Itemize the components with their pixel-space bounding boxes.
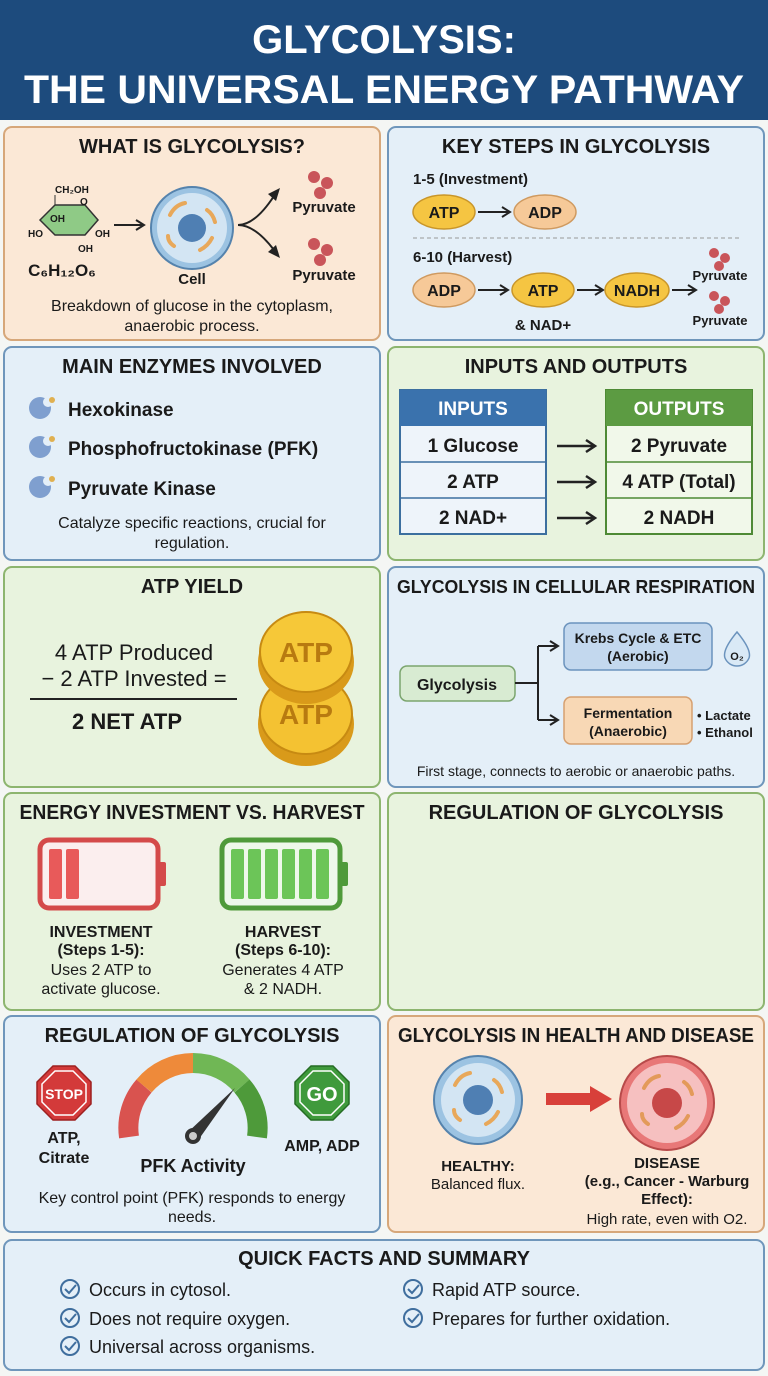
icon: ATP coins: ATP xyxy=(279,637,333,668)
panel: main enzymes: regulation. xyxy=(155,535,229,552)
panel: energy investment vs harvest: INVESTMENT xyxy=(49,924,153,941)
panel: key steps xyxy=(388,127,764,340)
icon: green battery xyxy=(222,840,348,908)
table: outputs: 4 ATP (Total) xyxy=(622,472,736,493)
panel: energy investment vs harvest xyxy=(4,793,380,1010)
panel: regulation: Key control point (PFK) responds to energy xyxy=(39,1190,345,1207)
panel: key steps: Pyruvate xyxy=(693,313,747,328)
panel: ATP yield xyxy=(4,567,380,787)
panel: main enzymes: MAIN ENZYMES INVOLVED xyxy=(62,356,322,378)
panel: quick facts: Prepares for further oxidation. xyxy=(432,1309,670,1329)
panel: main enzymes: Phosphofructokinase (PFK) xyxy=(68,439,318,460)
panel: glycolysis in cellular respiration: (Anaerobic) xyxy=(589,723,667,739)
panel: key steps: 6-10 (Harvest) xyxy=(413,249,512,266)
panel: health and disease: Balanced flux. xyxy=(431,1176,525,1193)
heading: what is glycolysis: WHAT IS GLYCOLYSIS? xyxy=(79,136,305,158)
panel: energy investment vs harvest: HARVEST xyxy=(245,924,321,941)
icon: stop sign xyxy=(37,1066,91,1167)
panel: key steps: ADP xyxy=(528,205,562,222)
panel: quick facts: QUICK FACTS AND SUMMARY xyxy=(238,1248,531,1270)
icon: go sign: AMP, ADP xyxy=(284,1138,360,1155)
arrow: split xyxy=(238,188,280,258)
panel: health and disease: DISEASE xyxy=(634,1155,700,1172)
panel: key steps: 1-5 (Investment) xyxy=(413,171,528,188)
icon: glucose: O xyxy=(80,197,88,208)
panel: glycolysis in cellular respiration xyxy=(388,567,764,787)
panel: what is glycolysis: anaerobic process. xyxy=(124,318,260,335)
icon: ATP coins xyxy=(258,612,354,766)
icon: cell xyxy=(151,187,233,288)
panel: inputs and outputs xyxy=(388,347,764,560)
panel: quick facts: Rapid ATP source. xyxy=(432,1280,580,1300)
panel: key steps: & NAD+ xyxy=(515,317,571,334)
header: GLYCOLYSIS: xyxy=(252,18,516,62)
panel: energy investment vs harvest: (Steps 1-5): xyxy=(57,942,145,959)
panel: glycolysis in cellular respiration: • Lactate xyxy=(697,708,751,723)
panel: ATP yield: ATP YIELD xyxy=(141,576,243,598)
panel: regulation: REGULATION OF GLYCOLYSIS xyxy=(45,1025,339,1047)
panel: glycolysis in cellular respiration: GLYCOLYSIS IN CELLULAR RESPIRATION xyxy=(397,577,755,597)
icon: glucose: HO xyxy=(28,229,43,240)
table: outputs: OUTPUTS xyxy=(634,399,724,420)
panel: energy investment vs harvest: activate glucose. xyxy=(41,981,161,998)
panel: key steps: ATP xyxy=(528,283,559,300)
icon: go sign: GO xyxy=(306,1084,338,1106)
icon: glucose: OH xyxy=(78,244,93,255)
panel: glycolysis in cellular respiration: Krebs Cycle & ETC xyxy=(575,630,701,646)
icon: glucose: C₆H₁₂O₆ xyxy=(28,261,96,280)
table: inputs xyxy=(400,390,546,534)
table: inputs: 2 ATP xyxy=(447,472,499,493)
panel: key steps: ADP xyxy=(427,283,461,300)
panel: energy investment vs harvest: Generates 4 ATP xyxy=(222,962,344,979)
panel: ATP yield: 2 NET ATP xyxy=(72,709,182,734)
panel: regulation (empty): REGULATION OF GLYCOLYSIS xyxy=(429,802,723,824)
panel: regulation xyxy=(4,1016,380,1232)
icon: disease cell xyxy=(620,1056,714,1150)
panel: energy investment vs harvest: Uses 2 ATP to xyxy=(51,962,151,979)
panel: energy investment vs harvest: (Steps 6-10): xyxy=(235,942,331,959)
panel: inputs and outputs: INPUTS AND OUTPUTS xyxy=(465,356,687,378)
icon: stop sign: Citrate xyxy=(39,1150,89,1167)
table: inputs: 2 NAD+ xyxy=(439,508,507,529)
panel: regulation (empty) xyxy=(388,793,764,1010)
panel: key steps: Pyruvate xyxy=(693,268,747,283)
panel: ATP yield: 4 ATP Produced xyxy=(55,640,213,665)
panel: quick facts xyxy=(4,1240,764,1370)
arrow: red xyxy=(546,1086,612,1112)
table: inputs: INPUTS xyxy=(438,399,508,420)
panel: key steps: KEY STEPS IN GLYCOLYSIS xyxy=(442,136,710,158)
table: outputs: 2 NADH xyxy=(644,508,714,529)
panel: quick facts: Universal across organisms. xyxy=(89,1337,315,1357)
panel: main enzymes: Pyruvate Kinase xyxy=(68,479,216,500)
table: outputs xyxy=(606,390,752,534)
icon: stop sign: ATP, xyxy=(47,1130,81,1147)
gauge xyxy=(128,1063,258,1176)
icon: O2 drop xyxy=(724,632,750,666)
panel: key steps: NADH xyxy=(614,283,660,300)
panel: regulation: needs. xyxy=(168,1209,216,1226)
icon: red battery xyxy=(40,840,166,908)
pyruvate outputs: Pyruvate xyxy=(292,267,356,284)
panel: glycolysis in cellular respiration: • Ethanol xyxy=(697,725,753,740)
table: outputs: 2 Pyruvate xyxy=(631,436,727,457)
panel: main enzymes: Catalyze specific reactions, crucial for xyxy=(58,515,326,532)
icon: healthy cell xyxy=(434,1056,522,1144)
pyruvate outputs xyxy=(292,171,356,284)
panel: health and disease: (e.g., Cancer - Warburg xyxy=(585,1173,749,1190)
icon: ATP coins: ATP xyxy=(279,699,333,730)
panel: health and disease: High rate, even with O2. xyxy=(587,1211,747,1228)
panel: health and disease: GLYCOLYSIS IN HEALTH AND DISEASE xyxy=(398,1025,754,1047)
icon: go sign xyxy=(284,1066,360,1155)
panel: main enzymes xyxy=(4,347,380,560)
panel: glycolysis in cellular respiration: First stage, connects to aerobic or anaerobic paths. xyxy=(417,763,735,779)
panel: key steps: ATP xyxy=(429,205,460,222)
header xyxy=(0,0,768,120)
icon: cell: Cell xyxy=(178,271,206,288)
panel: health and disease: HEALTHY: xyxy=(441,1158,515,1175)
caption: Breakdown of glucose in the cytoplasm, xyxy=(51,298,333,315)
panel: health and disease xyxy=(388,1016,764,1232)
panel: ATP yield: − 2 ATP Invested = xyxy=(41,666,227,691)
icon: glucose xyxy=(28,185,110,280)
table: inputs: 1 Glucose xyxy=(428,436,518,457)
icon: O2 drop: O₂ xyxy=(730,651,744,663)
panel: glycolysis in cellular respiration: (Aerobic) xyxy=(607,648,669,664)
icon: glucose: OH xyxy=(50,214,65,225)
pyruvate outputs: Pyruvate xyxy=(292,199,356,216)
panel: glycolysis in cellular respiration: Fermentation xyxy=(584,705,672,721)
gauge: PFK Activity xyxy=(140,1156,246,1176)
header: THE UNIVERSAL ENERGY PATHWAY xyxy=(24,68,744,112)
panel: energy investment vs harvest: & 2 NADH. xyxy=(244,981,322,998)
panel: what is glycolysis xyxy=(4,127,380,340)
arrow xyxy=(114,220,144,230)
icon: stop sign: STOP xyxy=(45,1086,83,1102)
icon: glucose: OH xyxy=(95,229,110,240)
icon: glucose: CH₂OH xyxy=(55,185,89,196)
panel: energy investment vs harvest: ENERGY INVESTMENT VS. HARVEST xyxy=(20,802,364,824)
panel: health and disease: Effect): xyxy=(641,1191,693,1208)
panel: quick facts: Occurs in cytosol. xyxy=(89,1280,231,1300)
panel: glycolysis in cellular respiration: Glycolysis xyxy=(417,677,497,694)
panel: main enzymes: Hexokinase xyxy=(68,400,174,421)
panel: quick facts: Does not require oxygen. xyxy=(89,1309,290,1329)
